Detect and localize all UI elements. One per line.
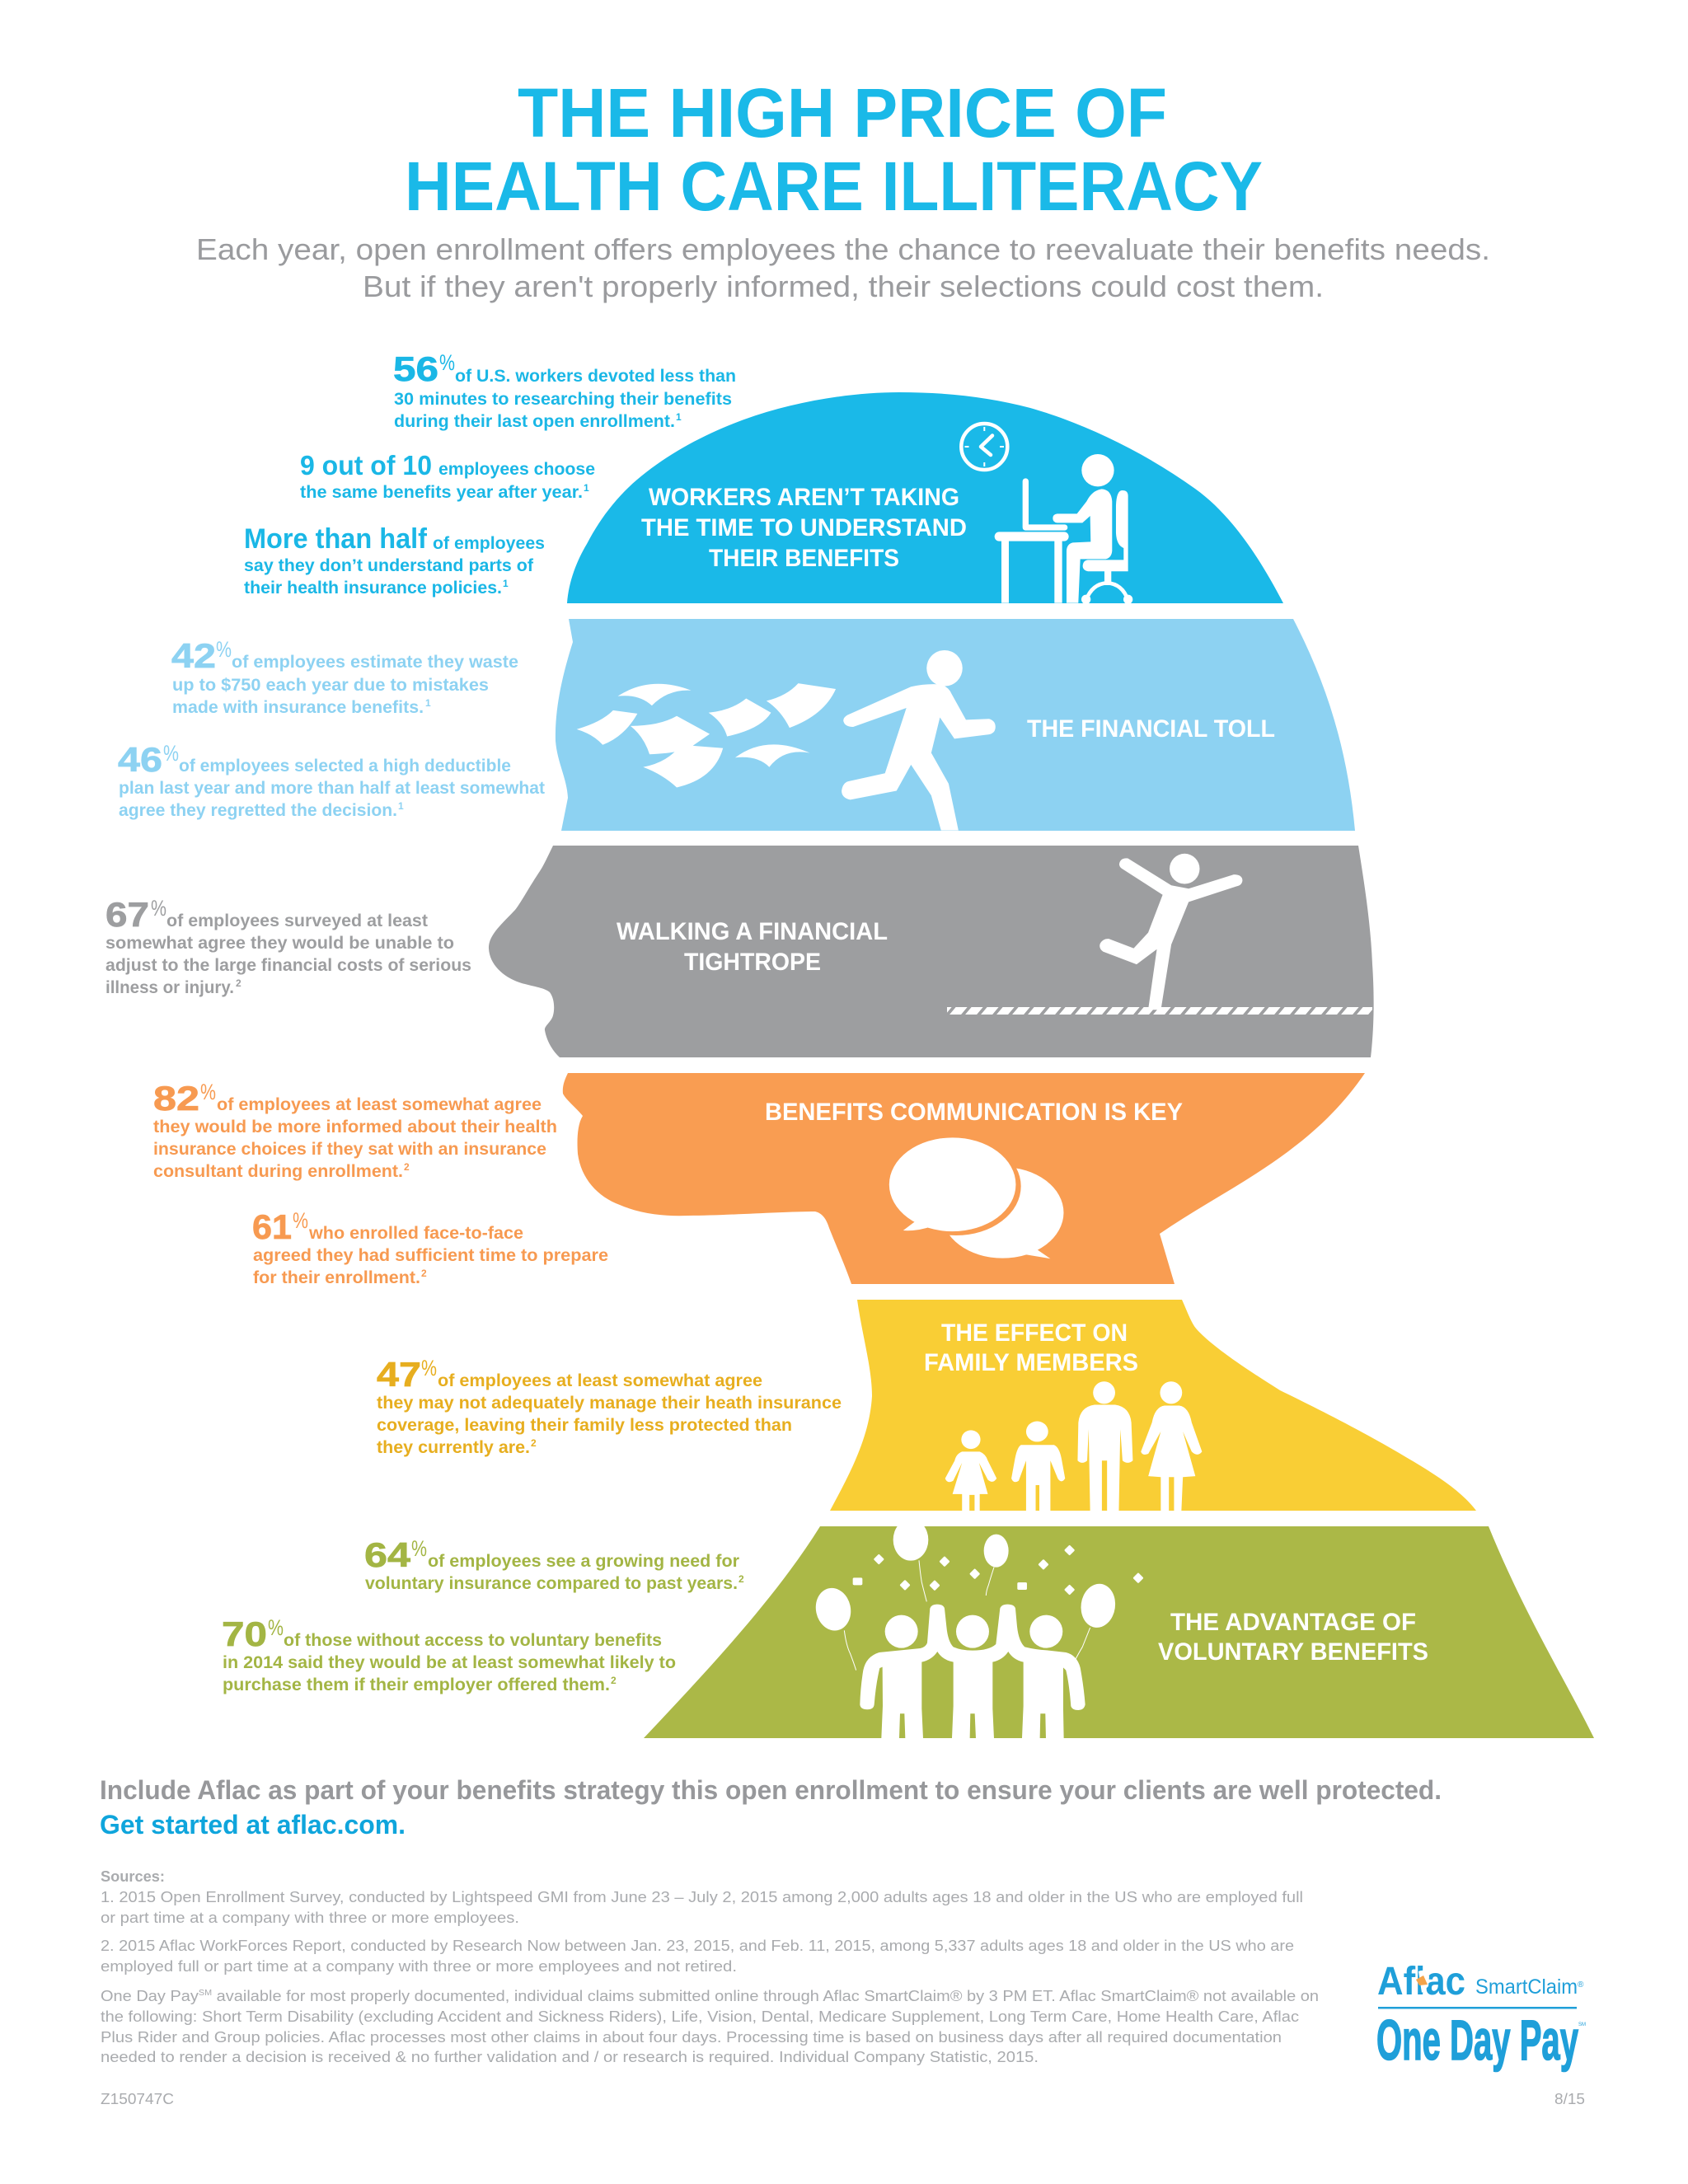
stat: 82%: 82 bbox=[153, 1079, 199, 1118]
stat: 46%: agree they regretted the decision. bbox=[119, 800, 397, 820]
footer date: 8/15 bbox=[1554, 2090, 1585, 2107]
stat: 42%: made with insurance benefits. bbox=[172, 697, 424, 717]
panel: benefits communication bbox=[563, 1073, 1365, 1284]
stat: 61% bbox=[252, 1207, 608, 1287]
sources: Sources: bbox=[101, 1868, 165, 1885]
band shape: head crown bbox=[567, 392, 1283, 603]
band heading: THE FINANCIAL TOLL bbox=[1027, 715, 1275, 743]
title bbox=[405, 74, 1263, 225]
band shape: orange chin bbox=[563, 1073, 1365, 1284]
stat: 46%: plan last year and more than half at least somewhat bbox=[119, 778, 545, 798]
band heading: VOLUNTARY BENEFITS bbox=[1158, 1638, 1428, 1666]
stat: more than half: More than half bbox=[244, 523, 428, 555]
band heading bbox=[1158, 1609, 1428, 1666]
stat: 82%: of employees at least somewhat agree bbox=[217, 1094, 542, 1114]
stat: 82%: insurance choices if they sat with an insurance bbox=[153, 1139, 546, 1159]
stat: 47%: 2 bbox=[531, 1437, 537, 1449]
title: THE HIGH PRICE OF bbox=[518, 74, 1167, 152]
band shape: yellow neck bbox=[830, 1300, 1476, 1511]
stat: 56%: 30 minutes to researching their benefits bbox=[394, 389, 732, 409]
stat: 9 out of 10: 1 bbox=[584, 482, 589, 494]
icon: celebrating people with balloons bbox=[812, 1519, 1144, 1738]
stat: 61%: % bbox=[293, 1208, 308, 1233]
stat: 70%: in 2014 said they would be at least somewhat likely to bbox=[223, 1652, 676, 1672]
band heading: WALKING A FINANCIAL bbox=[617, 918, 888, 945]
stat: 9 out of 10: 9 out of 10 bbox=[300, 450, 432, 480]
sources: 2. 2015 Aflac WorkForces Report, conducted by Research Now between Jan. 23, 2015, and Feb. 11, 2015, among 5,337 adults ages 18 and older in the US who are bbox=[101, 1937, 1294, 1954]
stat: 42%: 1 bbox=[425, 697, 431, 709]
icon: clock bbox=[961, 424, 1007, 470]
panel: walking a financial tightrope bbox=[489, 846, 1374, 1057]
stat: 70%: 2 bbox=[611, 1675, 617, 1686]
call to action: Include Aflac as part of your benefits strategy this open enrollment to ensure your clients are well protected. bbox=[100, 1775, 1442, 1805]
logo: Aflac SmartClaim One Day Pay bbox=[1376, 1960, 1586, 2072]
icon: duck bbox=[1416, 1971, 1429, 1993]
stat: 9 out of 10: the same benefits year after year. bbox=[300, 482, 583, 502]
stat: 70%: 70 bbox=[222, 1615, 267, 1653]
logo: Aflac SmartClaim One Day Pay: Aflac bbox=[1377, 1960, 1465, 2004]
band heading: THE TIME TO UNDERSTAND bbox=[641, 514, 967, 541]
panel: the advantage of voluntary benefits bbox=[644, 1519, 1594, 1738]
stat: 67%: of employees surveyed at least bbox=[166, 911, 428, 930]
stat: 46%: 1 bbox=[398, 800, 404, 812]
stat: 47%: of employees at least somewhat agree bbox=[438, 1371, 762, 1390]
band shape: light blue bbox=[556, 619, 1355, 831]
band heading: THE EFFECT ON bbox=[941, 1319, 1128, 1347]
stat: 82%: consultant during enrollment. bbox=[153, 1161, 403, 1181]
stat: 67% bbox=[106, 895, 471, 997]
sources bbox=[101, 1868, 1319, 2065]
band heading: THEIR BENEFITS bbox=[709, 545, 899, 572]
stat: more than half bbox=[244, 523, 545, 598]
call to action bbox=[100, 1775, 1442, 1840]
stat: 61%: 61 bbox=[252, 1207, 292, 1246]
stat: 9 out of 10 bbox=[300, 450, 595, 502]
subtitle: But if they aren't properly informed, their selections could cost them. bbox=[363, 269, 1324, 303]
stat: 61%: for their enrollment. bbox=[253, 1268, 420, 1287]
stat: 64%: % bbox=[411, 1536, 427, 1561]
icon: speech bubbles bbox=[889, 1137, 1063, 1258]
stat: 56%: 1 bbox=[676, 411, 682, 423]
stat: 67%: illness or injury. bbox=[106, 977, 234, 997]
stat: 64%: voluntary insurance compared to past years. bbox=[365, 1573, 738, 1593]
stat: 70%: % bbox=[268, 1615, 284, 1640]
stat: 64%: 64 bbox=[364, 1535, 411, 1574]
band heading: TIGHTROPE bbox=[684, 949, 821, 976]
panel: workers aren't taking the time bbox=[567, 392, 1283, 604]
stat: 70%: of those without access to voluntary benefits bbox=[284, 1630, 662, 1650]
sources: One Day Pay bbox=[101, 1987, 191, 2004]
stat: more than half: say they don’t understand parts of bbox=[244, 555, 534, 575]
sources: needed to render a decision is received & no further validation and / or research is required. Individual Company Statistic, 2015. bbox=[101, 2048, 1039, 2065]
icon: tightrope bbox=[947, 1007, 1372, 1015]
subtitle bbox=[196, 232, 1490, 303]
sources: SM bbox=[199, 1989, 212, 1998]
stat: 46%: 46 bbox=[118, 740, 162, 779]
sources: the following: Short Term Disability (excluding Accident and Sickness Riders), Life, Vision, Dental, Medicare Supplement, Long Term Care, Home Health Care, Aflac bbox=[101, 2008, 1299, 2025]
stat: 47%: coverage, leaving their family less protected than bbox=[377, 1415, 792, 1435]
stat: more than half: 1 bbox=[503, 578, 509, 589]
band heading: THE ADVANTAGE OF bbox=[1170, 1609, 1416, 1636]
stat: 82%: 2 bbox=[404, 1161, 410, 1173]
stat: 56%: 56 bbox=[393, 349, 438, 388]
stat: 67%: 2 bbox=[236, 977, 241, 989]
stat: 61%: agreed they had sufficient time to prepare bbox=[253, 1245, 608, 1265]
stat: 46% bbox=[118, 740, 545, 820]
stat: 70% bbox=[222, 1615, 676, 1694]
stat: 82%: % bbox=[200, 1080, 216, 1104]
call to action: Get started at aflac.com. bbox=[100, 1810, 406, 1840]
icon: running man and flying papers bbox=[577, 650, 996, 831]
band shape: gray face bbox=[489, 846, 1374, 1057]
stat: 70%: purchase them if their employer offered them. bbox=[223, 1675, 610, 1694]
footer code: Z150747C bbox=[101, 2090, 174, 2107]
stat: 56%: of U.S. workers devoted less than bbox=[455, 366, 736, 386]
band heading: FAMILY MEMBERS bbox=[924, 1349, 1138, 1376]
band heading: WORKERS AREN’T TAKING bbox=[649, 484, 959, 511]
icon: worker at desk bbox=[995, 454, 1132, 604]
stat: 46%: of employees selected a high deductible bbox=[179, 756, 511, 776]
stat: 61%: 2 bbox=[421, 1268, 427, 1279]
sources: Plus Rider and Group policies. Aflac processes most other claims in about four days. Processing time is based on business days after all required documentation bbox=[101, 2028, 1282, 2046]
panel: the financial toll bbox=[556, 619, 1355, 831]
stat: 42%: 42 bbox=[171, 636, 216, 675]
sources: or part time at a company with three or more employees. bbox=[101, 1909, 519, 1926]
stat: 61%: who enrolled face-to-face bbox=[308, 1223, 523, 1243]
sources: 1. 2015 Open Enrollment Survey, conducted by Lightspeed GMI from June 23 – July 2, 2015 among 2,000 adults ages 18 and older in the US who are employed full bbox=[101, 1888, 1303, 1905]
stat: 47%: % bbox=[421, 1356, 437, 1380]
stat: 47%: 47 bbox=[377, 1355, 421, 1394]
sources: available for most properly documented, individual claims submitted online through Aflac SmartClaim® by 3 PM ET. Aflac SmartClaim® not available on bbox=[212, 1987, 1319, 2004]
stat: 67%: adjust to the large financial costs of serious bbox=[106, 955, 471, 975]
band heading: BENEFITS COMMUNICATION IS KEY bbox=[765, 1099, 1183, 1126]
stat: 47% bbox=[377, 1355, 842, 1457]
stat: 82% bbox=[153, 1079, 557, 1181]
panel: the effect on family members bbox=[830, 1300, 1476, 1511]
stat: 42% bbox=[171, 636, 518, 717]
stat: more than half: their health insurance policies. bbox=[244, 578, 502, 598]
logo: Aflac SmartClaim One Day Pay: ® bbox=[1578, 1980, 1584, 1990]
stat: 42%: up to $750 each year due to mistakes bbox=[172, 675, 489, 695]
sources: employed full or part time at a company with three or more employees and not retired. bbox=[101, 1957, 737, 1975]
stat: 47%: they currently are. bbox=[377, 1437, 530, 1457]
stat: 42%: % bbox=[216, 637, 232, 662]
stat: 67%: % bbox=[151, 896, 166, 921]
subtitle: Each year, open enrollment offers employees the chance to reevaluate their benefits needs. bbox=[196, 232, 1490, 266]
stat: 47%: they may not adequately manage their heath insurance bbox=[377, 1393, 842, 1413]
logo: Aflac SmartClaim One Day Pay: SM bbox=[1578, 2022, 1586, 2027]
stat: 64% bbox=[364, 1535, 744, 1593]
title: HEALTH CARE ILLITERACY bbox=[405, 148, 1263, 225]
stat: 9 out of 10: employees choose bbox=[438, 459, 595, 479]
stat: more than half: of employees bbox=[433, 533, 545, 553]
stat: 56%: during their last open enrollment. bbox=[394, 411, 675, 431]
stat: 46%: % bbox=[163, 741, 179, 766]
icon: family bbox=[945, 1381, 1202, 1511]
band heading bbox=[617, 918, 888, 976]
stat: 64%: 2 bbox=[738, 1573, 744, 1585]
stat: 67%: 67 bbox=[106, 895, 149, 934]
stat: 56%: % bbox=[439, 350, 455, 375]
stat: 56% bbox=[393, 349, 736, 431]
band heading bbox=[641, 484, 967, 572]
stat: 42%: of employees estimate they waste bbox=[232, 652, 518, 672]
logo: Aflac SmartClaim One Day Pay: SmartClaim bbox=[1475, 1975, 1578, 1999]
stat: 82%: they would be more informed about their health bbox=[153, 1117, 557, 1137]
band shape: green shoulders bbox=[644, 1526, 1594, 1738]
stat: 67%: somewhat agree they would be unable to bbox=[106, 933, 454, 953]
band heading bbox=[924, 1319, 1138, 1376]
stat: 64%: of employees see a growing need for bbox=[428, 1551, 740, 1571]
icon: tightrope walker bbox=[1100, 854, 1242, 1010]
